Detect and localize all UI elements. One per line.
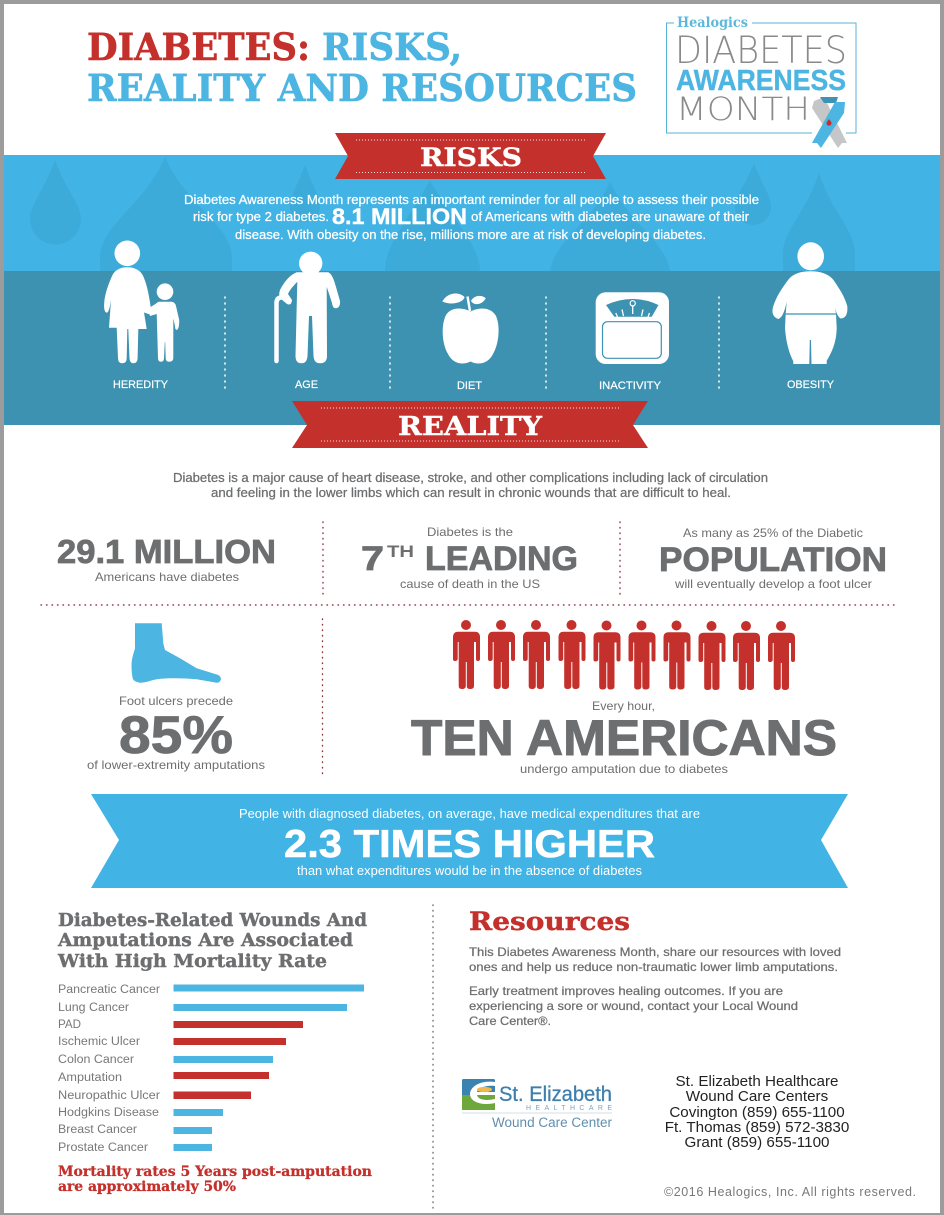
stat: foot ulcers: of lower-extremity amputations <box>87 758 265 772</box>
banner: medical expenditures <box>91 794 848 888</box>
copyright: ©2016 Healogics, Inc. All rights reserved. <box>664 1185 916 1199</box>
banner: medical expenditures: 2.3 TIMES HIGHER <box>284 823 655 866</box>
banner: reality <box>292 401 648 448</box>
chart heading <box>57 911 367 972</box>
icon row: ten red figures <box>453 620 795 690</box>
logo: St. Elizabeth Healthcare: St. Elizabeth <box>499 1083 612 1106</box>
mortality note <box>58 1164 372 1195</box>
banner: risks: RISKS <box>420 143 522 172</box>
panel: mortality chart <box>57 911 372 1195</box>
risks paragraph: of Americans with diabetes are unaware of their <box>471 210 749 224</box>
banner: risks <box>335 133 606 179</box>
risk labels: DIET <box>457 380 482 392</box>
risk labels: INACTIVITY <box>599 380 662 392</box>
stat: 7th leading: LEADING <box>425 540 578 578</box>
logo: Healogics Diabetes Awareness Month: DIABETES <box>675 29 847 72</box>
mortality note: Mortality rates 5 Years post-amputation <box>58 1164 372 1180</box>
bar chart labels: Breast Cancer <box>58 1124 137 1136</box>
reality paragraph: and feeling in the lower limbs which can result in chronic wounds that are difficult to heal. <box>211 486 731 500</box>
panel: resources <box>462 907 916 1199</box>
stat: population: will eventually develop a foot ulcer <box>674 577 872 591</box>
resources text: experiencing a sore or wound, contact your Local Wound <box>469 999 798 1013</box>
stat: foot ulcers <box>87 623 265 772</box>
risks paragraph: Diabetes Awareness Month represents an important reminder for all people to assess their possible <box>184 193 759 207</box>
logo: Healogics Diabetes Awareness Month: MONTH <box>676 90 810 128</box>
title: DIABETES: <box>87 25 310 69</box>
title: RISKS, <box>322 25 462 69</box>
mortality note: are approximately 50% <box>58 1179 236 1195</box>
bar chart labels: Ischemic Ulcer <box>58 1036 140 1048</box>
risk labels: HEREDITY <box>113 379 169 391</box>
stat: 7th leading: Diabetes is the <box>427 525 513 539</box>
risks paragraph: 8.1 MILLION <box>332 204 467 229</box>
risks paragraph <box>184 193 759 242</box>
stat: population: As many as 25% of the Diabetic <box>683 526 863 540</box>
stat: foot ulcers: Foot ulcers precede <box>119 694 233 708</box>
chart heading: Diabetes-Related Wounds And <box>58 911 367 931</box>
contact details: Ft. Thomas (859) 572-3830 <box>665 1119 849 1136</box>
logo: St. Elizabeth Healthcare <box>462 1079 613 1130</box>
icon: awareness ribbon <box>812 97 847 148</box>
banner: reality: REALITY <box>398 412 542 442</box>
stat: 7th leading <box>361 525 578 591</box>
risks paragraph: disease. With obesity on the rise, millions more are at risk of developing diabetes. <box>235 228 706 242</box>
icon: inactivity, weighing scale <box>596 292 669 364</box>
risks paragraph: risk for type 2 diabetes. <box>193 210 329 224</box>
stat: foot ulcers: 85% <box>119 706 233 765</box>
contact details: Grant (859) 655-1100 <box>685 1134 829 1151</box>
resources text: This Diabetes Awareness Month, share our resources with loved <box>469 945 841 959</box>
banner: medical expenditures: than what expenditures would be in the absence of diabetes <box>297 864 642 878</box>
contact details: St. Elizabeth Healthcare <box>676 1073 838 1090</box>
contact details <box>665 1073 849 1151</box>
bar chart labels: Neuropathic Ulcer <box>58 1090 160 1102</box>
banner: medical expenditures: People with diagnosed diabetes, on average, have medical expenditures that are <box>239 807 700 821</box>
bar chart labels: Colon Cancer <box>58 1054 134 1066</box>
bar chart labels: Lung Cancer <box>58 1002 129 1014</box>
stat: population <box>659 526 887 591</box>
resources heading: Resources <box>469 907 630 936</box>
logo: St. Elizabeth Healthcare: HEALTHCARE <box>526 1105 612 1112</box>
title <box>87 25 637 110</box>
resources text: Early treatment improves healing outcomes. If you are <box>469 984 783 998</box>
chart heading: With High Mortality Rate <box>57 952 327 972</box>
risk labels: OBESITY <box>787 379 835 391</box>
chart heading: Amputations Are Associated <box>57 931 353 951</box>
resources text: Care Center®. <box>469 1014 551 1028</box>
risk labels: AGE <box>295 379 318 391</box>
stat: 29.1 million: 29.1 MILLION <box>57 534 276 571</box>
contact details: Covington (859) 655-1100 <box>669 1104 845 1121</box>
bar chart labels: Amputation <box>58 1072 122 1084</box>
stat: 29.1 million: Americans have diabetes <box>95 570 239 584</box>
bar chart bars <box>174 984 364 1151</box>
icon: foot <box>132 623 221 683</box>
reality paragraph <box>173 471 768 500</box>
title: REALITY AND RESOURCES <box>87 66 637 110</box>
logo: Healogics Diabetes Awareness Month <box>666 15 856 148</box>
resources text: ones and help us reduce non-traumatic lower limb amputations. <box>469 960 838 974</box>
logo: Healogics Diabetes Awareness Month: Healogics <box>677 15 748 31</box>
reality paragraph: Diabetes is a major cause of heart disease, stroke, and other complications including lack of circulation <box>173 471 768 485</box>
stat: 7th leading: cause of death in the US <box>400 577 540 591</box>
resources text <box>469 945 841 1028</box>
bar chart labels: PAD <box>58 1019 81 1031</box>
icon: age, elderly person with cane <box>276 252 340 363</box>
icon: diet, apple <box>442 294 499 364</box>
bar chart labels <box>58 984 160 1154</box>
panel: risks <box>4 155 940 425</box>
logo: St. Elizabeth Healthcare: Wound Care Center <box>492 1115 613 1130</box>
stat: population: POPULATION <box>659 541 887 579</box>
stat: ten americans: TEN AMERICANS <box>411 710 837 766</box>
stat: ten americans: Every hour, <box>592 699 655 713</box>
stat: 7th leading: TH <box>387 542 414 561</box>
bar chart labels: Pancreatic Cancer <box>58 984 160 996</box>
stat: ten americans: undergo amputation due to diabetes <box>520 762 728 776</box>
risk labels <box>113 379 835 392</box>
icon: obesity, large person <box>772 242 847 364</box>
logo: Healogics Diabetes Awareness Month: AWARENESS <box>676 65 846 97</box>
background water drops <box>30 157 855 271</box>
stat: 7th leading: 7 <box>361 540 384 578</box>
bar chart labels: Hodgkins Disease <box>58 1107 159 1119</box>
bar chart labels: Prostate Cancer <box>58 1142 148 1154</box>
contact details: Wound Care Centers <box>686 1088 829 1105</box>
icon: heredity, mother and child <box>104 240 179 363</box>
